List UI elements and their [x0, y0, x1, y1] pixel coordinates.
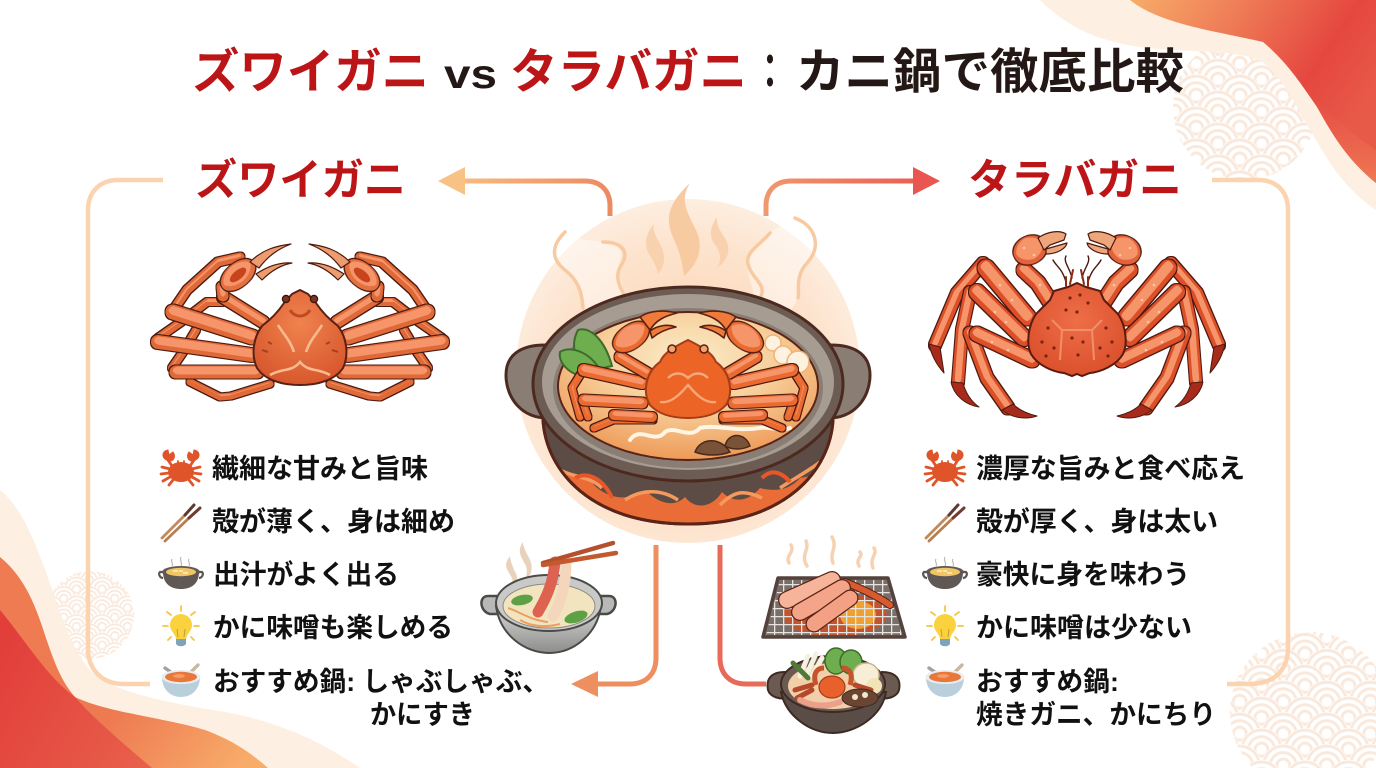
icon: crab (right) — [925, 450, 965, 485]
heading: ズワイガニ: ズワイガニ — [195, 157, 406, 205]
arrow: pot to タラバガニ — [766, 167, 940, 216]
arrow: pot to ズワイガニ — [438, 167, 610, 216]
icon: bulb (right) — [927, 606, 963, 646]
arrow: pot to grilled crab — [720, 545, 766, 684]
halo circle — [516, 199, 860, 543]
pot body with fire glaze — [541, 419, 835, 526]
icon: chopsticks (right) — [926, 505, 964, 541]
icon: crab (left) — [161, 450, 201, 485]
icon: bulb (left) — [163, 606, 199, 646]
text: crab miso: かに味噌も楽しめる — [213, 613, 453, 643]
text: recommended hot pots (right) — [976, 667, 1216, 730]
decorative wave pattern: top right — [1173, 36, 1317, 180]
text: rich broth: 出汁がよく出る — [213, 559, 399, 590]
king crab illustration — [929, 230, 1225, 418]
icon: bowl (left) — [162, 665, 200, 697]
green leaf — [560, 329, 612, 375]
text: thin shell: 殻が薄く、身は細め — [212, 506, 455, 537]
background: bottom left corner waves — [0, 490, 360, 768]
icon: bowl (right) — [926, 665, 964, 697]
text: recommended hot pots (right): おすすめ鍋: — [976, 667, 1119, 697]
pot rim — [533, 287, 843, 481]
text: recommended hot pots (left): おすすめ鍋: しゃぶしゃぶ、 — [213, 667, 549, 697]
text: little crab miso: かに味噌は少ない — [976, 613, 1192, 643]
title: カニ鍋で徹底比較 — [796, 46, 1184, 99]
snow crab illustration — [158, 244, 442, 397]
bubbling foam — [630, 427, 790, 440]
steam wisps — [554, 183, 815, 321]
illustration: kanisuki hot pot — [768, 648, 899, 733]
mushrooms — [695, 436, 750, 455]
left panel frame — [88, 180, 163, 684]
text: recommended hot pots (left) — [213, 667, 549, 730]
title — [192, 46, 1184, 99]
decorative wave pattern: bottom right — [1230, 632, 1376, 768]
tofu — [765, 335, 809, 373]
text: hearty meat: 豪快に身を味わう — [976, 560, 1190, 590]
central hot pot illustration — [506, 183, 870, 543]
pot handles — [506, 345, 870, 418]
illustration: grilled crab legs — [760, 537, 910, 638]
title: ： — [754, 46, 786, 99]
illustration: shabu-shabu pot — [481, 542, 616, 653]
background: top right corner waves — [1040, 0, 1376, 210]
decorative wave pattern: bottom left — [46, 571, 134, 659]
text: rich umami: 濃厚な旨みと食べ応え — [976, 454, 1245, 484]
title: vs — [444, 51, 497, 97]
broth — [558, 312, 818, 460]
text: recommended hot pots (left): かにすき — [370, 700, 475, 730]
text: thick shell: 殻が厚く、身は太い — [976, 506, 1218, 537]
icon: chopsticks (left) — [162, 505, 200, 541]
title: ズワイガニ — [192, 46, 429, 99]
crab in pot — [572, 311, 804, 428]
icon: pot (left) — [159, 557, 203, 589]
icon: pot (right) — [923, 557, 967, 589]
text: delicate sweetness: 繊細な甘みと旨味 — [212, 454, 428, 484]
arrow: pot to shabu-shabu — [571, 545, 656, 697]
right panel frame — [1212, 180, 1288, 684]
text: recommended hot pots (right): 焼きガニ、かにちり — [976, 700, 1216, 730]
heading: タラバガニ: タラバガニ — [968, 157, 1182, 205]
title: タラバガニ — [510, 46, 747, 99]
